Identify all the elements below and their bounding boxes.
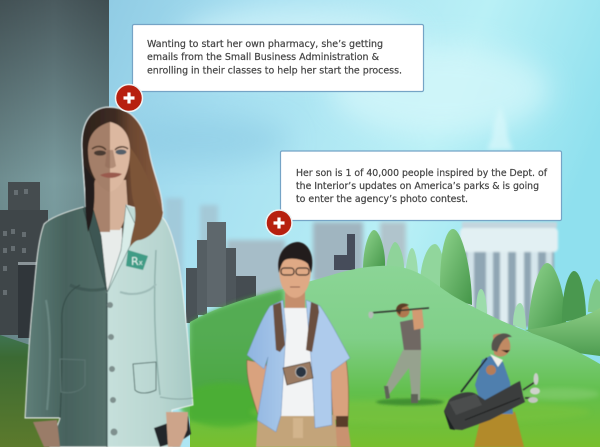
- man: sweater: [475, 356, 513, 414]
- mid-ground dark buildings: [186, 222, 355, 323]
- left grass: [0, 335, 60, 447]
- woman: right lapel: [107, 205, 137, 293]
- son: head: [278, 242, 312, 298]
- son: blue shirt right: [306, 300, 350, 428]
- son: neck: [285, 285, 305, 312]
- trees behind hill: [363, 229, 600, 330]
- son: right hand: [335, 425, 351, 447]
- son: wristwatch: [336, 416, 348, 427]
- woman: left hand: [33, 420, 60, 447]
- man: head: [493, 334, 510, 357]
- son: blue shirt left: [247, 300, 286, 432]
- left wall: [0, 0, 109, 447]
- golfer: club: [370, 308, 429, 313]
- callout: pharmacy: emails from the Small Business Administration &: [147, 52, 379, 63]
- man: hand: [486, 365, 496, 375]
- callout: photo contest: [280, 151, 562, 220]
- woman: hair front over chest: [128, 145, 163, 247]
- callout: pharmacy: Wanting to start her own pharmacy, she’s getting: [147, 39, 383, 50]
- son: khaki pants: [256, 415, 337, 447]
- distant blurred buildings: [165, 198, 406, 300]
- man: moustache: [501, 350, 510, 353]
- woman: lapels: [83, 205, 107, 293]
- man: trousers: [474, 412, 524, 447]
- callout: pharmacy: enrolling in their classes to help her start the process.: [147, 66, 402, 76]
- woman: phone: [154, 416, 191, 447]
- callout: pharmacy: [132, 24, 424, 92]
- son with camera: [247, 242, 351, 447]
- callout: photo contest: to enter the agency’s photo contest.: [296, 194, 468, 205]
- icon: plus marker, photo contest: [266, 210, 292, 236]
- woman: coat right light half: [107, 205, 193, 447]
- son: right arm: [330, 360, 349, 420]
- capitol building: [460, 222, 558, 327]
- golf bag: [444, 373, 540, 430]
- woman: Rx badge: [126, 250, 148, 270]
- son: camera: [283, 362, 313, 385]
- woman: neck and chest: [88, 180, 110, 232]
- right background hill: [525, 308, 600, 356]
- golfer: shoes: [384, 386, 418, 403]
- golfer: legs: [384, 350, 421, 400]
- man: grey hair: [492, 333, 512, 352]
- woman: back hair: [82, 107, 163, 240]
- main rolling hill: [190, 266, 600, 447]
- left-side buildings: [0, 182, 48, 338]
- son: camera straps: [273, 302, 319, 352]
- callout: photo contest: the Interior’s updates on America’s parks & is going: [296, 181, 539, 192]
- golfer: arm: [412, 308, 424, 330]
- man: strap: [461, 358, 487, 392]
- woman: coat left dark half: [25, 207, 107, 447]
- woman: Rx badge: Rx: [131, 255, 143, 268]
- woman: coat folds: [46, 250, 193, 447]
- hill shading and grass patches: [180, 289, 600, 427]
- icon: plus marker, pharmacy: [116, 84, 142, 112]
- woman: coat pockets: [60, 359, 156, 393]
- golfer: shadow: [376, 398, 444, 406]
- man with golf bag: [444, 333, 540, 447]
- golfer: shirt: [400, 318, 421, 350]
- golfer: head: [396, 304, 410, 318]
- son: left arm: [247, 360, 272, 420]
- woman pharmacist: [25, 107, 193, 447]
- woman: face: [88, 122, 130, 192]
- woman: left hair strands: [84, 165, 95, 232]
- callout: photo contest: Her son is 1 of 40,000 people inspired by the Dept. of: [296, 168, 547, 179]
- distant capitol statue: [487, 105, 513, 150]
- son: white t-shirt: [281, 308, 314, 416]
- woman: white undershirt: [98, 228, 122, 290]
- golfer: [368, 303, 444, 406]
- man: collar: [490, 354, 503, 367]
- woman: buttons: [107, 302, 118, 436]
- woman: right hand: [166, 412, 188, 447]
- woman: neck light side: [110, 180, 128, 230]
